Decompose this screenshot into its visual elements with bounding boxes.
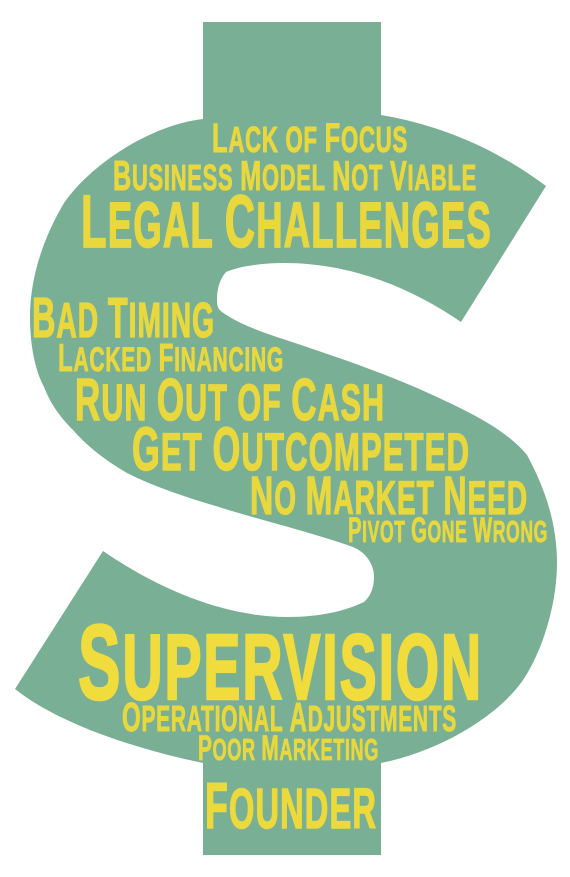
text: Run Out of Cash: RUN OUT OF CASH bbox=[75, 367, 385, 433]
text: Poor Marketing: POOR MARKETING bbox=[198, 729, 379, 768]
text: Business Model Not Viable: BUSINESS MODEL NOT VIABLE bbox=[113, 152, 477, 199]
text: Operational Adjustments: OPERATIONAL ADJUSTMENTS bbox=[122, 694, 457, 740]
text: Founder: FOUNDER bbox=[205, 769, 377, 842]
text: Lack of Focus: LACK OF FOCUS bbox=[212, 115, 408, 161]
text: Bad Timing: BAD TIMING bbox=[32, 286, 215, 350]
text: No Market Need: NO MARKET NEED bbox=[250, 466, 528, 526]
text: Lacked Financing: LACKED FINANCING bbox=[58, 337, 284, 380]
